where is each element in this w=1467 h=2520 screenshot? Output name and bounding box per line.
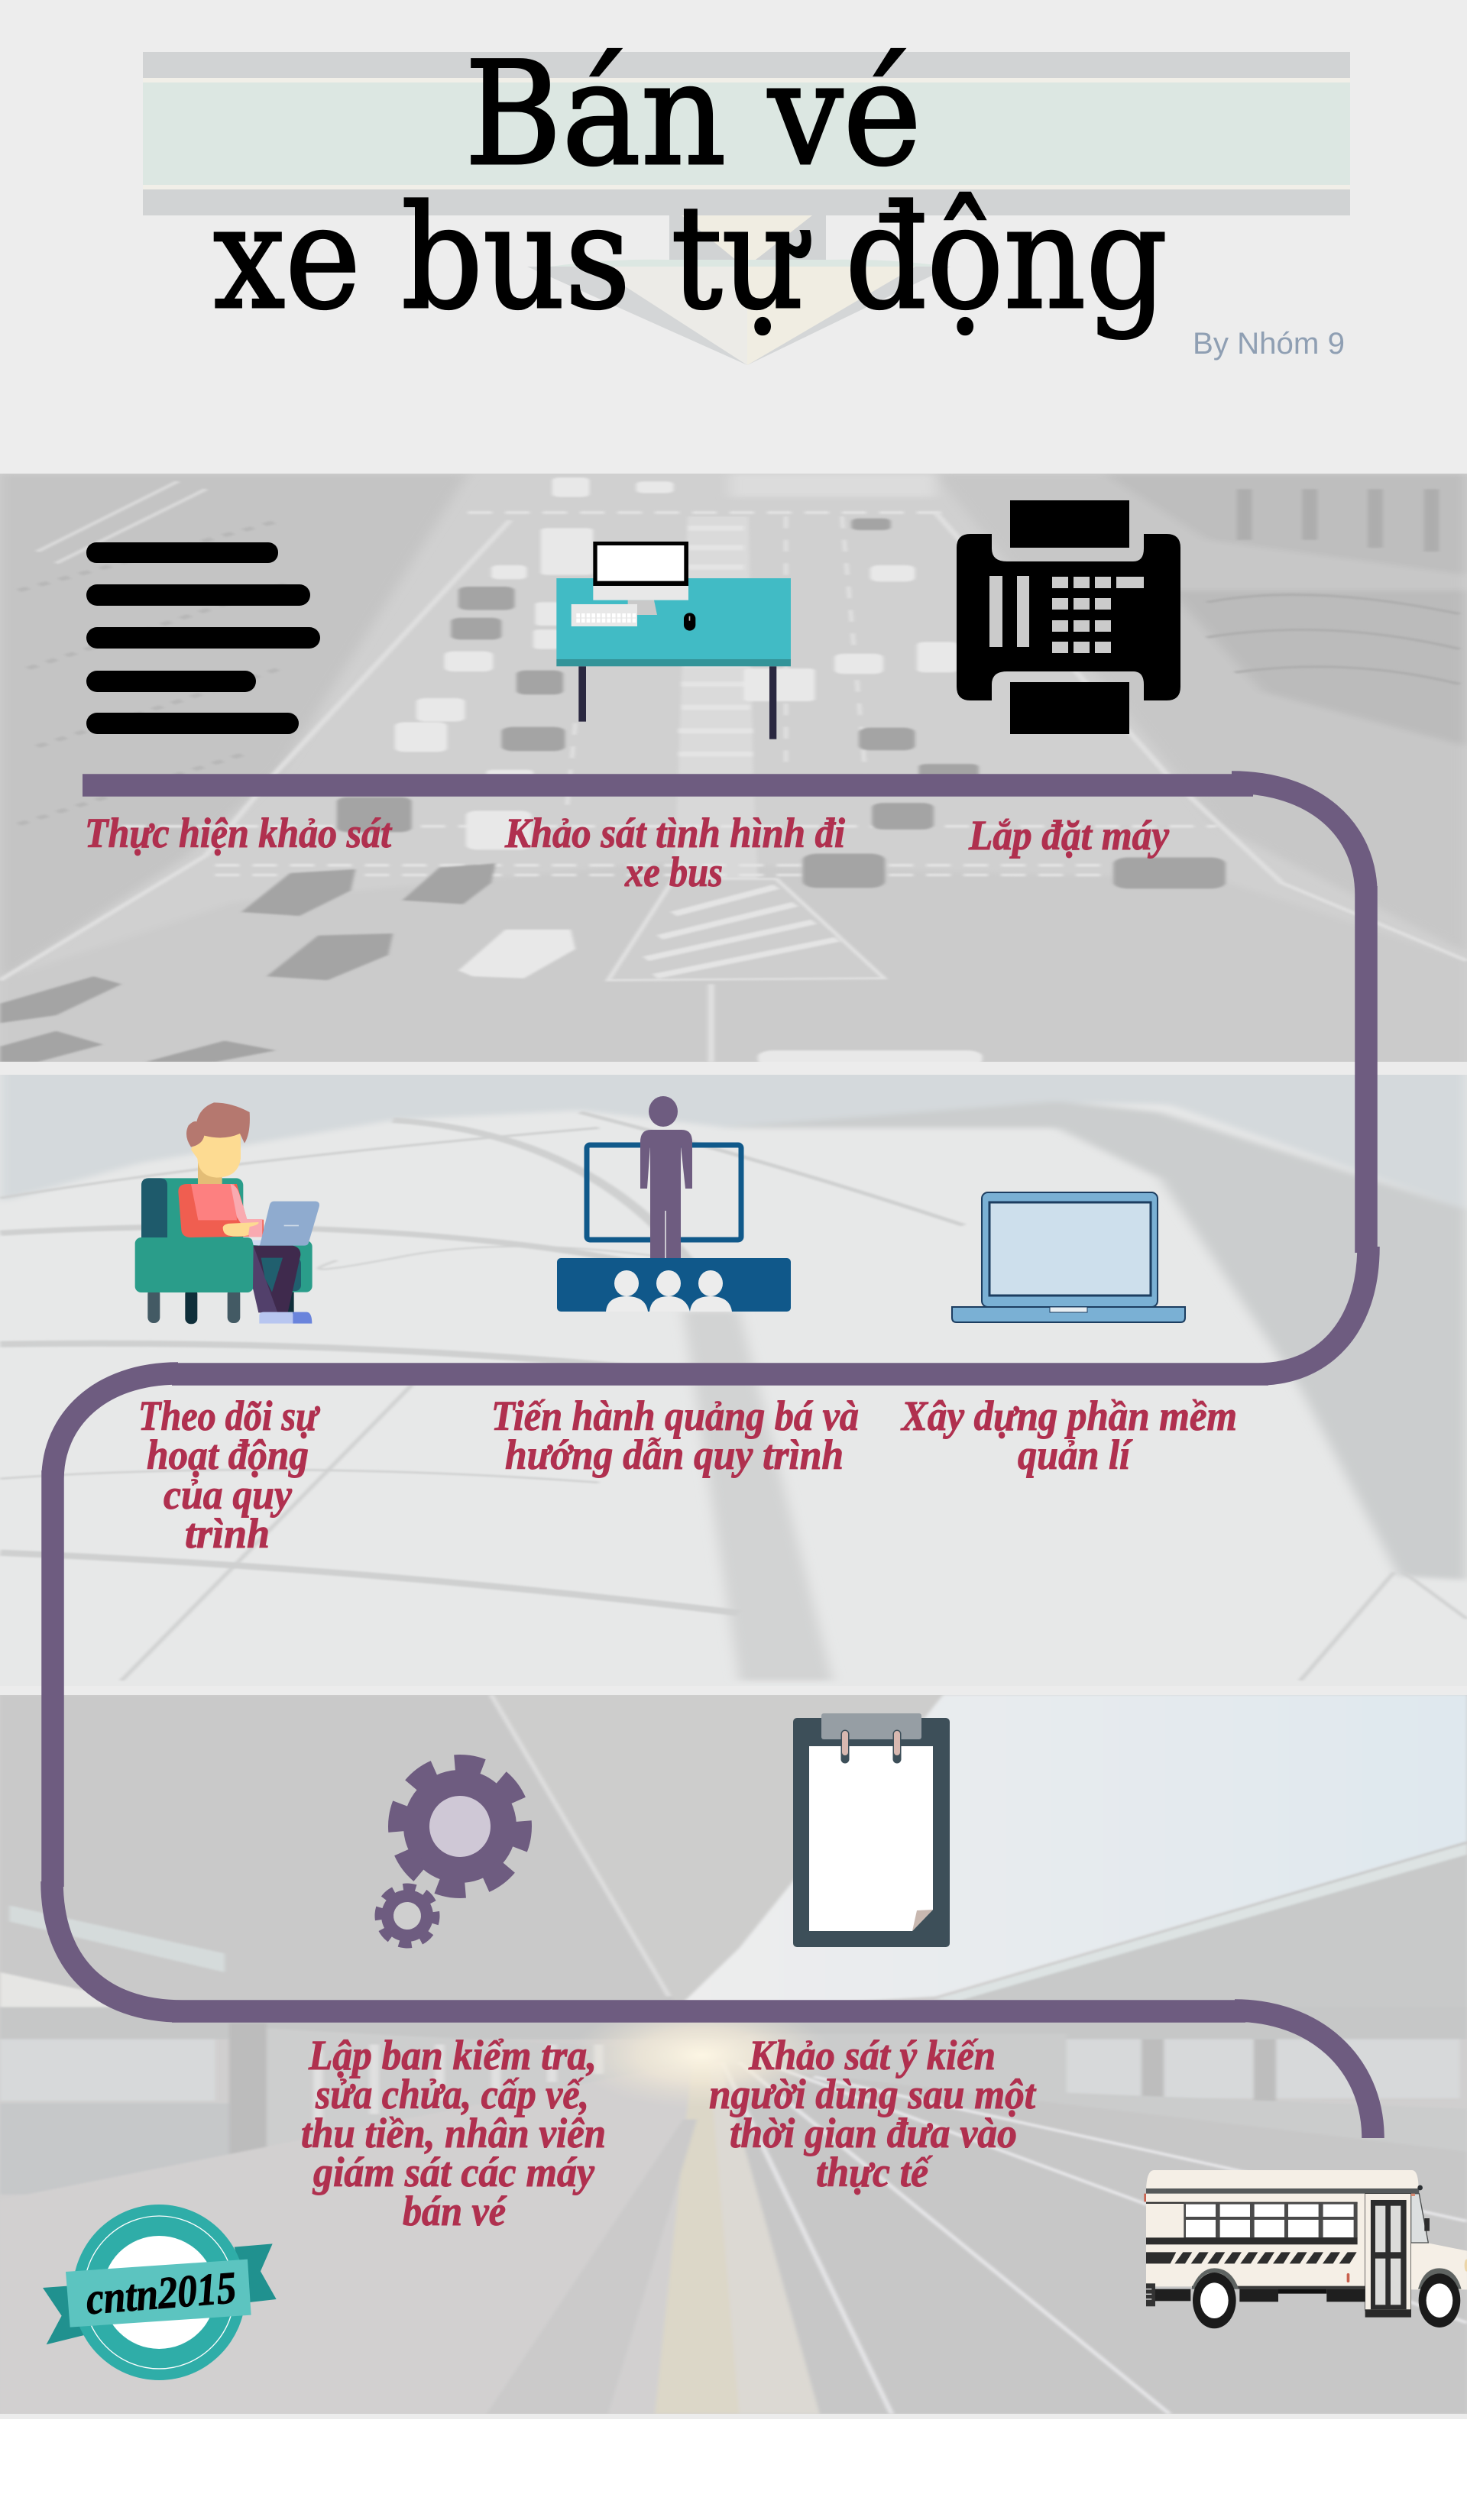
byline: By Nhóm 9 [1193, 327, 1345, 361]
label: step 5: Tiến hành quảng bá và [491, 1393, 859, 1439]
label: step 8: thời gian đưa vào [730, 2110, 1017, 2156]
label: step 4: Xây dựng phần mềm [900, 1393, 1237, 1439]
label: step 7: Lập ban kiểm tra, [308, 2032, 597, 2078]
process path [52, 782, 1373, 2138]
label: step 7: giám sát các máy [312, 2149, 595, 2195]
icon: gears [378, 1758, 529, 1945]
label: step 6: của quy [164, 1471, 293, 1518]
label: step 8: thực tế [816, 2149, 933, 2195]
cars [395, 477, 983, 1066]
badge: CNTN2015 ribbon [43, 2205, 277, 2380]
band between photos [0, 1062, 1467, 1075]
icon: laptop [952, 1192, 1185, 1322]
label: step 2 [504, 810, 846, 895]
icon: presenter with screen and audience [557, 1096, 791, 1312]
label: step 5 [491, 1393, 859, 1478]
icon: person with laptop in armchair [135, 1102, 319, 1324]
label: step 6: Theo dõi sự [138, 1393, 321, 1439]
label: step 1: Thực hiện khảo sát [85, 810, 393, 856]
label: step 8 [709, 2032, 1037, 2195]
label: step 2: Khảo sát tình hình đi [504, 810, 846, 856]
label: step 4 [900, 1393, 1237, 1478]
title [213, 31, 1167, 341]
panel: stadium roof photo background [0, 1069, 1467, 1686]
title: xe bus tự động [213, 175, 1167, 341]
label: step 7: thu tiền, nhân viên [301, 2110, 606, 2156]
label: step 8: người dùng sau một [709, 2071, 1037, 2117]
band between photos [0, 1686, 1467, 1695]
label: step 2: xe bus [624, 849, 723, 895]
badge: CNTN2015 ribbon: cntn2015 [84, 2262, 238, 2324]
label: step 7 [301, 2032, 606, 2234]
band below photos [0, 2414, 1467, 2419]
label: step 6: hoạt động [147, 1431, 309, 1478]
label: step 6: trình [185, 1510, 270, 1557]
label: step 7: sửa chửa, cấp vế, [315, 2071, 589, 2117]
label: step 7: bán vé [403, 2188, 507, 2234]
panel: road photo background [0, 474, 1467, 1085]
label: step 8: Khảo sát ý kiến [748, 2032, 996, 2078]
label: step 4: quản lí [1018, 1431, 1133, 1478]
title banner decoration [143, 52, 1350, 365]
label: step 6 [138, 1393, 321, 1557]
label: step 5: hướng dẫn quy trình [505, 1431, 844, 1478]
icon: desk with computer [556, 542, 791, 739]
panel: train station photo background [0, 1695, 1467, 2414]
label: step 3: Lắp đặt máy [968, 812, 1170, 859]
icon: school bus [1144, 2170, 1467, 2328]
title: Bán vé [465, 31, 921, 198]
building and tree texture [18, 481, 1459, 824]
icon: clipboard [793, 1713, 950, 1947]
icon: survey list lines [86, 542, 320, 734]
icon: fax machine [957, 500, 1180, 734]
